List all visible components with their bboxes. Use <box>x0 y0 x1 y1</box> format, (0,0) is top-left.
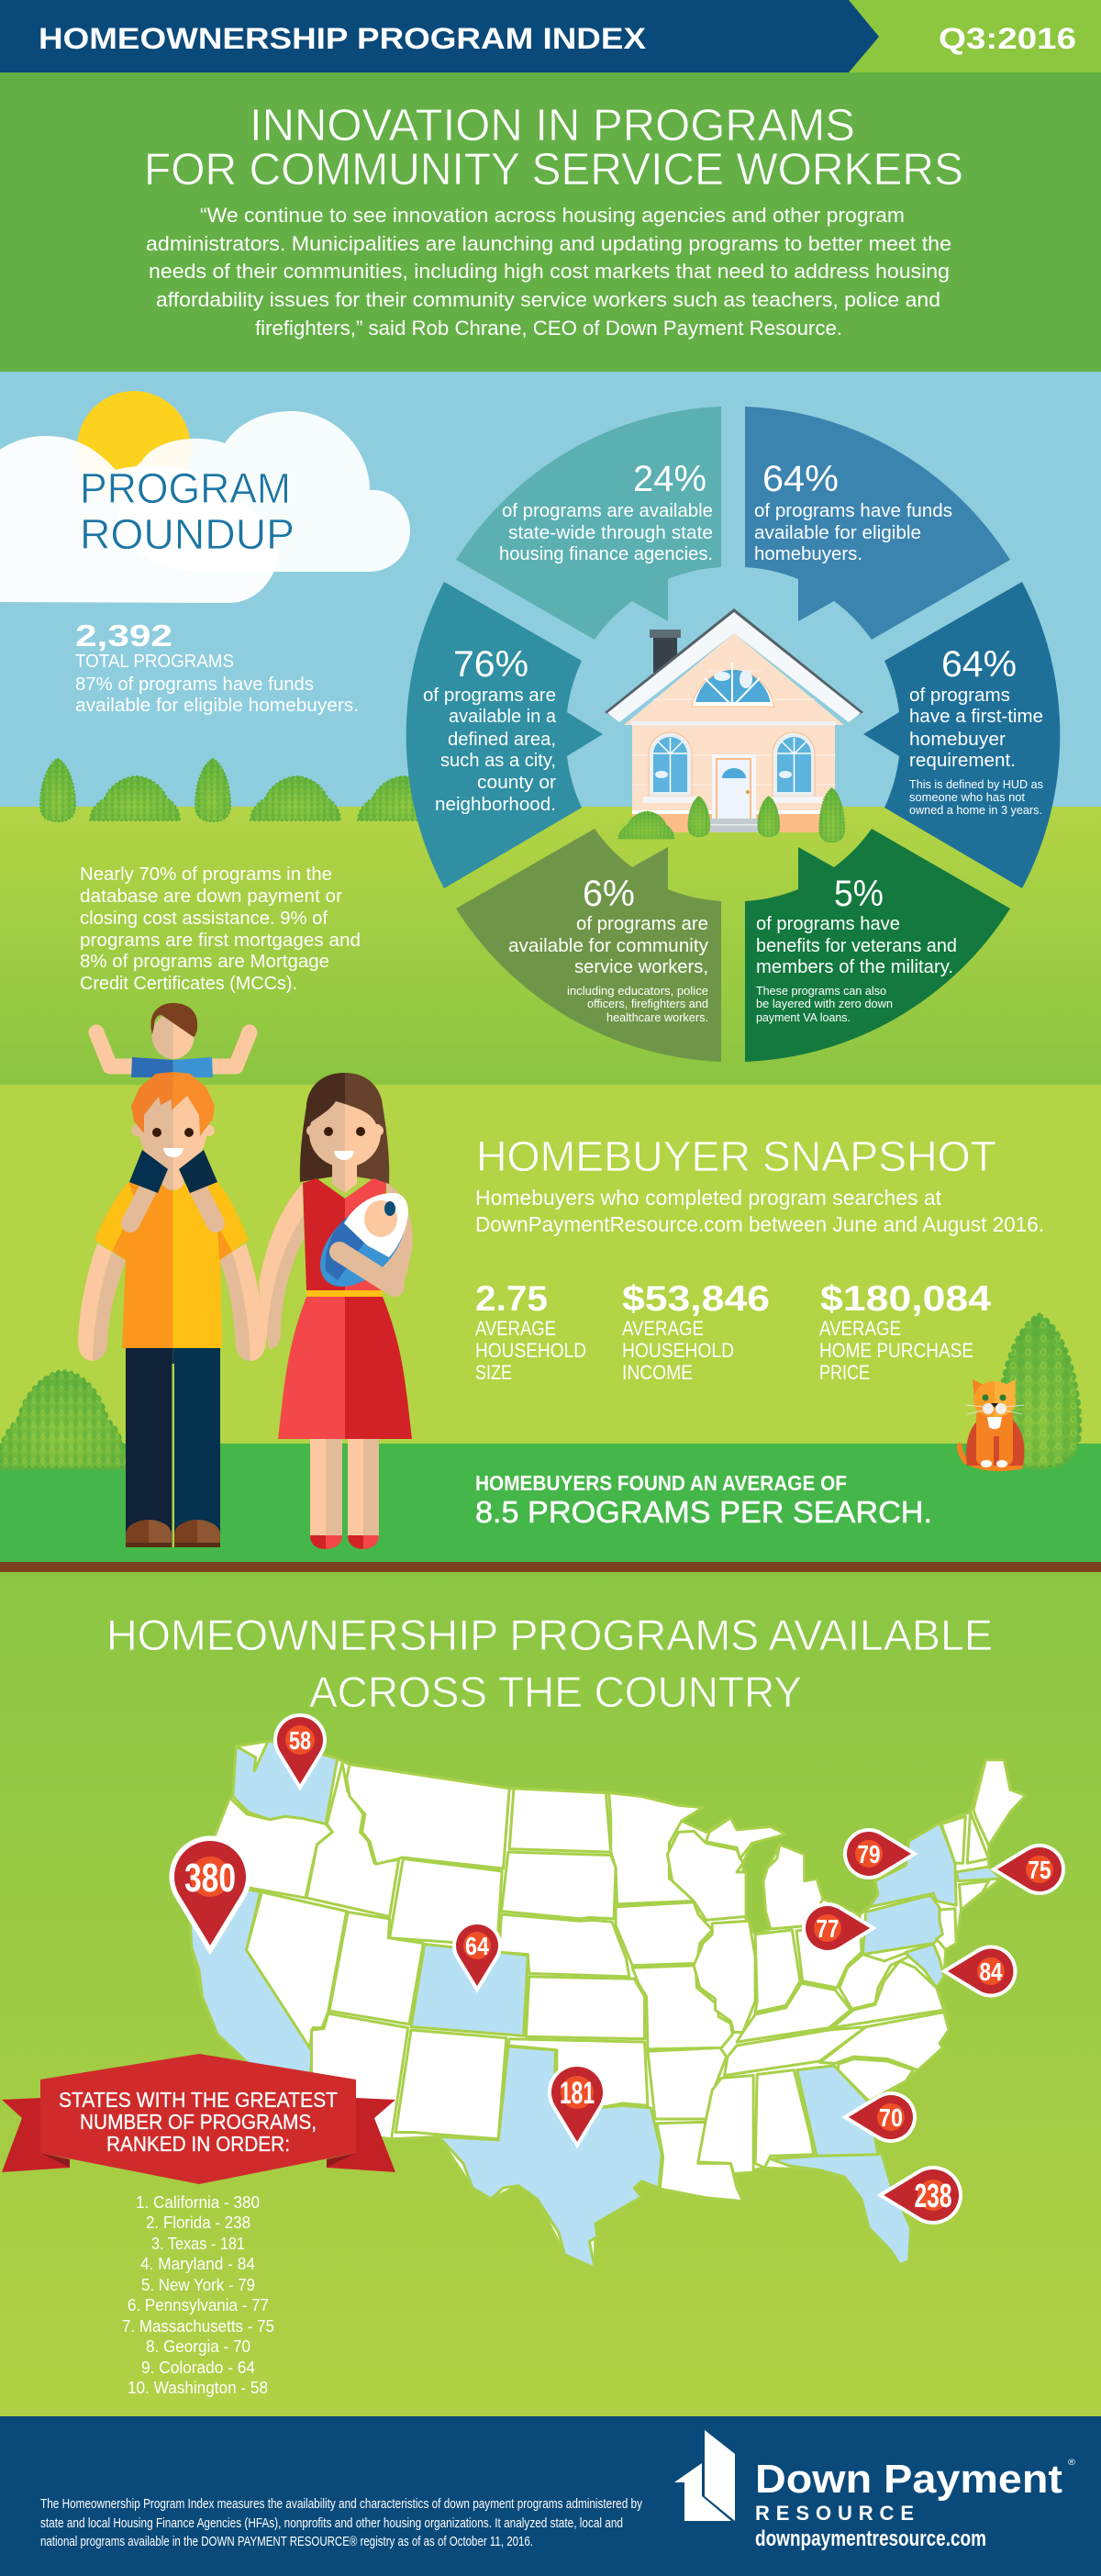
segment: defined area 76%: 76% <box>453 644 528 685</box>
segment: funds 64%: available for eligible <box>754 523 921 543</box>
segment: first-time 64%: This is defined by HUD as <box>909 777 1043 791</box>
segment: first-time 64%: someone who has not <box>909 790 1025 804</box>
heading: programs across the country: ACROSS THE COUNTRY <box>309 1667 802 1716</box>
segment: community service 6%: service workers, <box>574 957 708 977</box>
child legs <box>129 1150 217 1223</box>
footer methodology text: state and local Housing Finance Agencies (HFAs), nonprofits and other housing organizations. It analyzed state, local and <box>40 2515 623 2531</box>
heading: programs across the country <box>106 1611 993 1716</box>
intro quote: “We continue to see innovation across housing agencies and other program <box>200 204 905 227</box>
icon: left bush near family <box>0 1371 127 1468</box>
father arms <box>78 1243 265 1361</box>
map pin: Georgia 70: 70 <box>879 2103 903 2132</box>
ranked state list: 9. Colorado - 64 <box>141 2359 255 2377</box>
footer methodology text <box>40 2496 642 2549</box>
heading: homebuyer snapshot: HOMEBUYER SNAPSHOT <box>476 1132 996 1180</box>
mother head <box>306 1076 384 1193</box>
stat: household income: $53,846 <box>622 1279 770 1319</box>
illustration: family <box>78 1003 420 1549</box>
map pin: Pennsylvania 77: 77 <box>817 1914 839 1943</box>
program roundup heading: ROUNDUP <box>80 510 295 558</box>
map pin: Georgia 70 <box>841 2091 917 2143</box>
ranked state list <box>122 2193 274 2397</box>
stat: household income: AVERAGE <box>622 1317 704 1340</box>
map pin: Pennsylvania 77 <box>802 1902 877 1954</box>
intro quote: needs of their communities, including high cost markets that need to address housing <box>149 260 950 283</box>
map pin: California 380: 380 <box>184 1856 236 1901</box>
map pin: Florida 238 <box>877 2166 962 2225</box>
snapshot description: DownPaymentResource.com between June and August 2016. <box>475 1212 1044 1236</box>
average programs callout: 8.5 PROGRAMS PER SEARCH. <box>475 1495 932 1529</box>
total programs stat: 87% of programs have funds <box>75 675 314 695</box>
stat: household size: 2.75 <box>475 1279 548 1319</box>
segment: funds 64%: homebuyers. <box>754 544 862 564</box>
segment: veterans 5%: 5% <box>834 874 884 914</box>
segment: defined area 76%: such as a city, <box>440 751 556 771</box>
baby and mother's arm <box>305 1183 420 1302</box>
segment: state-wide 24% <box>456 407 721 640</box>
stat: household income: INCOME <box>622 1361 693 1384</box>
segment: defined area 76%: defined area, <box>448 730 556 750</box>
stat: household size: SIZE <box>475 1361 512 1384</box>
father head <box>131 1072 215 1190</box>
segment: funds 64% <box>745 407 1010 640</box>
mother legs and shoes <box>310 1439 379 1549</box>
ranked state list: 10. Washington - 58 <box>128 2379 268 2397</box>
segment: funds 64%: 64% <box>762 459 839 499</box>
father pants and shoes <box>126 1348 220 1547</box>
program type text: Nearly 70% of programs in the <box>80 864 332 885</box>
total programs stat: available for eligible homebuyers. <box>75 696 359 716</box>
intro quote <box>146 204 951 340</box>
intro quote: firefighters,” said Rob Chrane, CEO of Down Payment Resource. <box>255 317 842 340</box>
banner text <box>59 2088 338 2156</box>
right window <box>772 732 822 803</box>
ranked state list: 7. Massachusetts - 75 <box>122 2317 274 2336</box>
program type text: database are down payment or <box>80 887 342 907</box>
segment: first-time 64%: of programs <box>909 686 1010 706</box>
segment: veterans 5% <box>745 829 1010 1062</box>
segment: state-wide 24%: 24% <box>633 459 706 499</box>
segment: veterans 5%: benefits for veterans and <box>756 936 957 956</box>
map pin: Maryland 84 <box>940 1946 1018 1997</box>
total programs stat <box>75 619 359 716</box>
icon: house <box>605 608 863 842</box>
segment: defined area 76%: county or <box>477 773 556 793</box>
stat: household size: AVERAGE <box>475 1317 556 1340</box>
segment: first-time 64%: 64% <box>941 644 1017 685</box>
map pin: New York 79 <box>843 1828 918 1879</box>
intro quote: affordability issues for their community service workers such as teachers, police and <box>156 288 940 311</box>
segment: community service 6%: healthcare workers. <box>606 1010 708 1024</box>
child on shoulders <box>96 1003 250 1077</box>
icon: cat <box>960 1379 1024 1468</box>
mother arm holding hand <box>259 1184 304 1349</box>
stat: home purchase price: AVERAGE <box>819 1317 901 1340</box>
banner text: NUMBER OF PROGRAMS, <box>80 2110 317 2134</box>
segment: community service 6%: available for community <box>508 936 708 956</box>
map pin: California 380 <box>169 1835 251 1955</box>
segment: veterans 5%: be layered with zero down <box>756 997 893 1010</box>
segment: community service 6%: including educators, police <box>567 984 708 998</box>
intro quote: administrators. Municipalities are launching and updating programs to better meet the <box>146 232 951 255</box>
snapshot description <box>475 1186 1044 1236</box>
mother hair back <box>300 1073 389 1184</box>
map pin: Washington 58: 58 <box>289 1726 311 1755</box>
ranked state list: 4. Maryland - 84 <box>140 2255 255 2273</box>
mother dress <box>278 1178 412 1439</box>
map pin: Texas 181 <box>548 2063 606 2148</box>
stat: home purchase price: $180,084 <box>820 1279 991 1319</box>
segment: funds 64%: of programs have funds <box>754 501 952 521</box>
logo: Down Payment Resource <box>674 2430 1075 2551</box>
stat: home purchase price: PRICE <box>819 1361 870 1384</box>
banner text: STATES WITH THE GREATEST <box>59 2088 338 2112</box>
segment: veterans 5%: These programs can also <box>756 984 886 998</box>
segment: veterans 5%: payment VA loans. <box>756 1010 851 1024</box>
stat: household size: HOUSEHOLD <box>475 1339 586 1362</box>
segment: defined area 76% <box>406 582 603 888</box>
footer methodology text: national programs available in the DOWN PAYMENT RESOURCE® registry as of as of October 11, 2016. <box>40 2534 533 2549</box>
map pin: Massachusetts 75 <box>990 1844 1065 1895</box>
map pin: Florida 238: 238 <box>914 2177 952 2214</box>
stat: home purchase price <box>819 1279 991 1384</box>
map pin: Colorado 64: 64 <box>465 1932 489 1960</box>
segment: first-time 64%: have a first-time <box>909 707 1043 727</box>
program roundup heading <box>80 464 295 558</box>
average programs callout: HOMEBUYERS FOUND AN AVERAGE OF <box>475 1471 847 1495</box>
stat: home purchase price: HOME PURCHASE <box>819 1339 973 1362</box>
ranked state list: 8. Georgia - 70 <box>146 2337 250 2356</box>
segment: community service 6% <box>456 829 721 1062</box>
ribbon banner <box>2 2054 395 2184</box>
map pin: Texas 181: 181 <box>560 2076 595 2111</box>
icon: sun <box>77 391 191 505</box>
stat: household income <box>622 1279 770 1384</box>
header date: Q3:2016 <box>939 22 1076 55</box>
header bar <box>0 0 1101 72</box>
segment: community service 6%: 6% <box>583 874 635 914</box>
ranked state list: 6. Pennsylvania - 77 <box>128 2296 269 2314</box>
average programs callout <box>475 1471 932 1529</box>
map pin: Washington 58 <box>273 1713 327 1791</box>
heading: programs across the country: HOMEOWNERSHIP PROGRAMS AVAILABLE <box>106 1611 993 1659</box>
father shirt <box>95 1182 249 1348</box>
logo: Down Payment Resource: RESOURCE <box>755 2502 914 2525</box>
icon: cloud <box>0 411 410 603</box>
segment: first-time 64%: requirement. <box>909 751 1016 771</box>
map pin: Maryland 84: 84 <box>980 1957 1003 1986</box>
stat: household income: HOUSEHOLD <box>622 1339 734 1362</box>
segment: state-wide 24%: of programs are available <box>502 501 713 521</box>
total programs stat: TOTAL PROGRAMS <box>75 652 234 672</box>
ranked state list: 1. California - 380 <box>136 2193 260 2212</box>
header title: HOMEOWNERSHIP PROGRAM INDEX <box>39 22 647 55</box>
program type text: 8% of programs are Mortgage <box>80 952 329 972</box>
logo: Down Payment Resource: downpaymentresource.com <box>755 2526 986 2551</box>
attic window <box>692 663 774 707</box>
chart: US map by state <box>187 1741 1026 2268</box>
logo: Down Payment Resource: Down Payment <box>755 2457 1062 2502</box>
program type text <box>80 864 361 994</box>
main title <box>144 101 963 195</box>
program roundup heading: PROGRAM <box>80 464 291 512</box>
row of bushes <box>40 759 448 821</box>
ranked state list: 5. New York - 79 <box>141 2276 255 2294</box>
segment: veterans 5%: of programs have <box>756 914 900 934</box>
footer methodology text: The Homeownership Program Index measures the availability and characteristics of down payment programs administered by <box>40 2496 642 2512</box>
logo: Down Payment Resource: ® <box>1068 2458 1075 2467</box>
segment: first-time 64%: homebuyer <box>909 730 1006 750</box>
snapshot description: Homebuyers who completed program searches at <box>475 1186 942 1210</box>
segment: defined area 76%: of programs are <box>423 686 556 706</box>
program type text: Credit Certificates (MCCs). <box>80 974 297 994</box>
segment: defined area 76%: neighborhood. <box>435 795 556 815</box>
left window <box>643 732 696 803</box>
total programs stat: 2,392 <box>75 619 172 652</box>
segment: defined area 76%: available in a <box>449 707 557 727</box>
map pin: Colorado 64 <box>452 1921 502 1993</box>
segment: community service 6%: of programs are <box>576 914 708 934</box>
ranked state list: 2. Florida - 238 <box>146 2214 250 2232</box>
banner text: RANKED IN ORDER: <box>106 2132 290 2156</box>
door <box>712 754 756 819</box>
map pin: Massachusetts 75: 75 <box>1028 1856 1051 1884</box>
segment: first-time 64%: owned a home in 3 years. <box>909 803 1042 817</box>
segment: veterans 5%: members of the military. <box>756 957 953 977</box>
icon: tall bush behind cat <box>998 1315 1080 1468</box>
program type text: closing cost assistance. 9% of <box>80 909 328 929</box>
segment: state-wide 24%: housing finance agencies. <box>499 544 713 564</box>
segment: community service 6%: officers, firefighters and <box>587 997 708 1010</box>
stat: household size <box>475 1279 586 1384</box>
main title: INNOVATION IN PROGRAMS <box>250 101 855 151</box>
segment: state-wide 24%: state-wide through state <box>508 523 713 543</box>
map pin: New York 79: 79 <box>857 1840 881 1868</box>
program type text: programs are first mortgages and <box>80 931 361 951</box>
panel: statistics wheel <box>406 407 1060 1062</box>
main title: FOR COMMUNITY SERVICE WORKERS <box>144 145 963 195</box>
segment: first-time 64% <box>863 582 1060 888</box>
ranked state list: 3. Texas - 181 <box>151 2235 245 2253</box>
